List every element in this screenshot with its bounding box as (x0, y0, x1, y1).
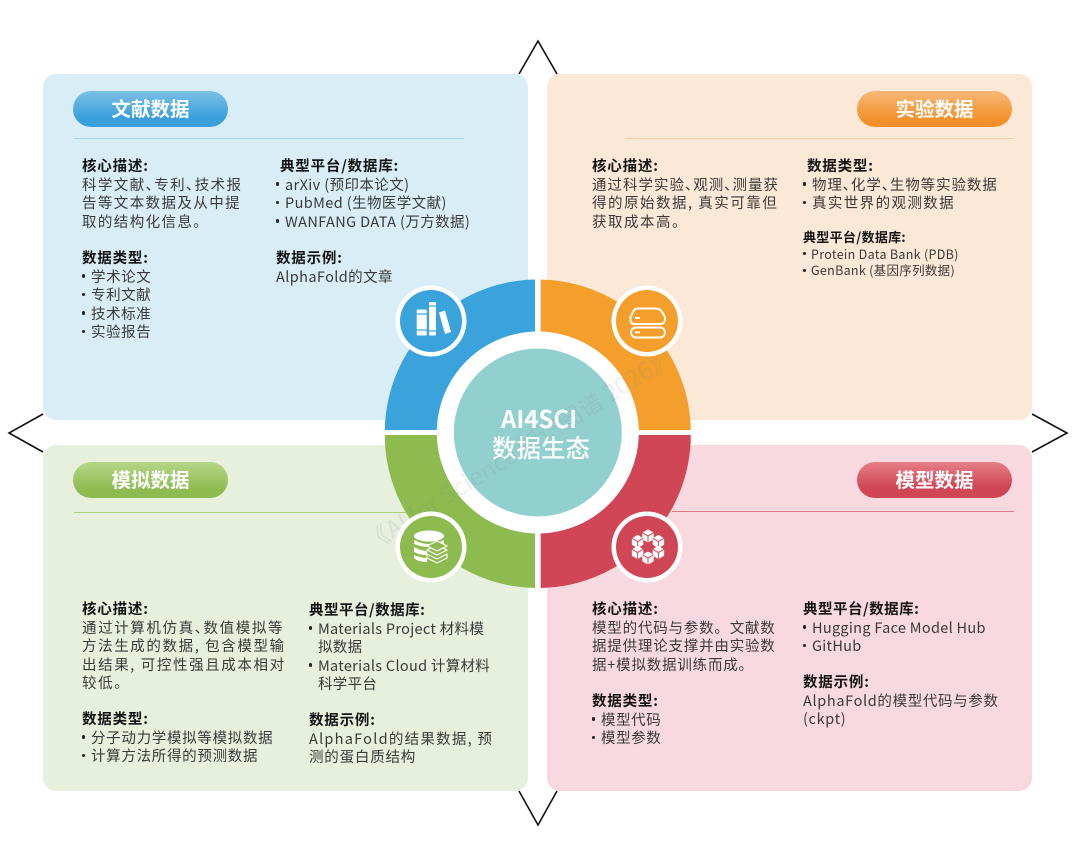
text: 数据示例: AlphaFold的文章 (276, 266, 393, 287)
text: 核心描述: 告等文本数据及从中提 (82, 192, 241, 213)
text: 典型平台/数据库 (803, 598, 986, 656)
text: 数据类型: 专利文献 (91, 284, 151, 305)
text: 数据示例: AlphaFold的结果数据, 预 (309, 728, 493, 749)
text: 核心描述: 科学文献、专利、技术报 (82, 174, 242, 195)
text: 数据示例: AlphaFold的模型代码与参数 (803, 690, 999, 711)
text: 数据示例: 测的蛋白质结构 (309, 746, 416, 767)
text: 典型平台/数据库: 典型平台/数据库: (280, 155, 399, 176)
text: 数据类型: 计算方法所得的预测数据 (91, 745, 258, 766)
segment: orange (541, 280, 691, 430)
icon: server (612, 286, 682, 356)
text: 核心描述: 方法生成的数据, 包含模型输 (82, 635, 286, 656)
text: 核心描述: 取的结构化信息。 (82, 211, 209, 232)
heading: 文献数据 (73, 91, 228, 127)
text: 数据类型: 模型代码 (601, 709, 661, 730)
text: 典型平台/数据库: WANFANG DATA (万方数据) (285, 211, 470, 232)
segment: green (385, 435, 535, 588)
panel: 文献数据 (43, 74, 528, 420)
text: 核心描述: 得的原始数据, 真实可靠但 (592, 192, 778, 213)
text: 核心描述 (82, 598, 286, 693)
text: 典型平台/数据库: 拟数据 (318, 636, 362, 657)
segment: red (541, 435, 691, 588)
text: 数据类型: 数据类型: (82, 708, 149, 729)
text: 数据类型: 真实世界的观测数据 (812, 192, 955, 213)
text: 核心描述: 核心描述: (82, 155, 149, 176)
text: 核心描述 (592, 155, 779, 232)
text: 典型平台/数据库: 典型平台/数据库: (309, 599, 425, 620)
text: 核心描述: 据+模拟数据训练而成。 (592, 654, 754, 675)
text: 数据示例: 数据示例: (803, 671, 870, 692)
text: 数据示例 (309, 709, 493, 767)
text: 典型平台/数据库: GitHub (812, 635, 862, 656)
watermark: 《AI for Science 知识图谱 2026》 (357, 339, 679, 558)
text: 典型平台/数据库 (276, 155, 470, 232)
text: 典型平台/数据库: PubMed (生物医学文献) (285, 192, 447, 213)
text: 数据类型: 数据类型: (592, 690, 659, 711)
heading: 模型数据: 模型数据 (895, 464, 974, 493)
text: 核心描述: 据提供理论支撑并由实验数 (592, 635, 776, 656)
text: 数据类型: 数据类型: (807, 155, 874, 176)
panel: 实验数据 (547, 74, 1032, 420)
panel: 模拟数据 (43, 445, 528, 791)
segment: blue (385, 280, 535, 430)
text: 典型平台/数据库: 典型平台/数据库: (803, 598, 919, 619)
text: 核心描述: 核心描述: (82, 598, 149, 619)
center circle: AI4SCI 数据生态: AI4SCI (500, 400, 577, 435)
text: 数据类型: 物理、化学、生物等实验数据 (812, 174, 998, 195)
heading: 实验数据 (857, 91, 1012, 127)
text: 数据类型: 技术标准 (91, 303, 151, 324)
text: 典型平台/数据库 (803, 227, 959, 279)
text: 核心描述: 通过计算机仿真、数值模拟等 (82, 617, 284, 638)
icon: cubes (612, 512, 682, 582)
text: 核心描述: 出结果, 可控性强且成本相对 (82, 654, 286, 675)
text: 核心描述: 模型的代码与参数。文献数 (592, 617, 776, 638)
text: 数据类型: 数据类型: (82, 247, 149, 268)
icon: books (396, 286, 466, 356)
center circle: AI4SCI 数据生态: 数据生态 (492, 430, 590, 465)
text: 核心描述: 核心描述: (592, 155, 659, 176)
text: 数据类型: 模型参数 (601, 727, 661, 748)
text: 核心描述: 获取成本高。 (592, 211, 688, 232)
text: 核心描述 (592, 598, 776, 675)
center circle: AI4SCI 数据生态 (454, 348, 622, 516)
text: 典型平台/数据库 (309, 599, 490, 694)
text: 数据类型 (82, 247, 151, 342)
text: 典型平台/数据库: GenBank (基因序列数据) (811, 260, 955, 279)
text: 核心描述: 通过科学实验、观测、测量获 (592, 174, 779, 195)
heading: 模型数据 (857, 462, 1012, 498)
text: 数据类型: 分子动力学模拟等模拟数据 (91, 727, 273, 748)
text: 数据示例 (276, 247, 393, 287)
text: 数据示例: 数据示例: (309, 709, 376, 730)
heading: 模拟数据: 模拟数据 (111, 464, 190, 493)
text: 典型平台/数据库: Materials Project 材料模 Materials Cloud 计算材料 (318, 618, 490, 676)
text: 数据类型 (592, 690, 661, 748)
text: 数据类型 (803, 155, 998, 213)
heading: 文献数据: 文献数据 (111, 93, 190, 122)
text: 数据类型: 学术论文 (91, 266, 151, 287)
icon: database (396, 512, 466, 582)
text: 核心描述: 核心描述: (592, 598, 659, 619)
text: 典型平台/数据库: 典型平台/数据库: (803, 227, 906, 246)
heading: 模拟数据 (73, 462, 228, 498)
text: 数据示例 (803, 671, 999, 729)
text: 典型平台/数据库: arXiv (预印本论文) (285, 174, 409, 195)
text: 典型平台/数据库: Protein Data Bank (PDB) (811, 244, 959, 263)
text: 核心描述: 较低。 (82, 672, 130, 693)
text: 数据类型 (82, 708, 273, 766)
text: 核心描述 (82, 155, 242, 232)
text: 数据示例: (ckpt) (803, 708, 846, 729)
heading: 实验数据: 实验数据 (895, 93, 974, 122)
text: 典型平台/数据库: Hugging Face Model Hub (812, 617, 986, 638)
text: 数据类型: 实验报告 (91, 321, 151, 342)
text: 数据示例: 数据示例: (276, 247, 343, 268)
panel: 模型数据 (547, 445, 1032, 791)
text: 典型平台/数据库: 科学平台 (318, 673, 377, 694)
